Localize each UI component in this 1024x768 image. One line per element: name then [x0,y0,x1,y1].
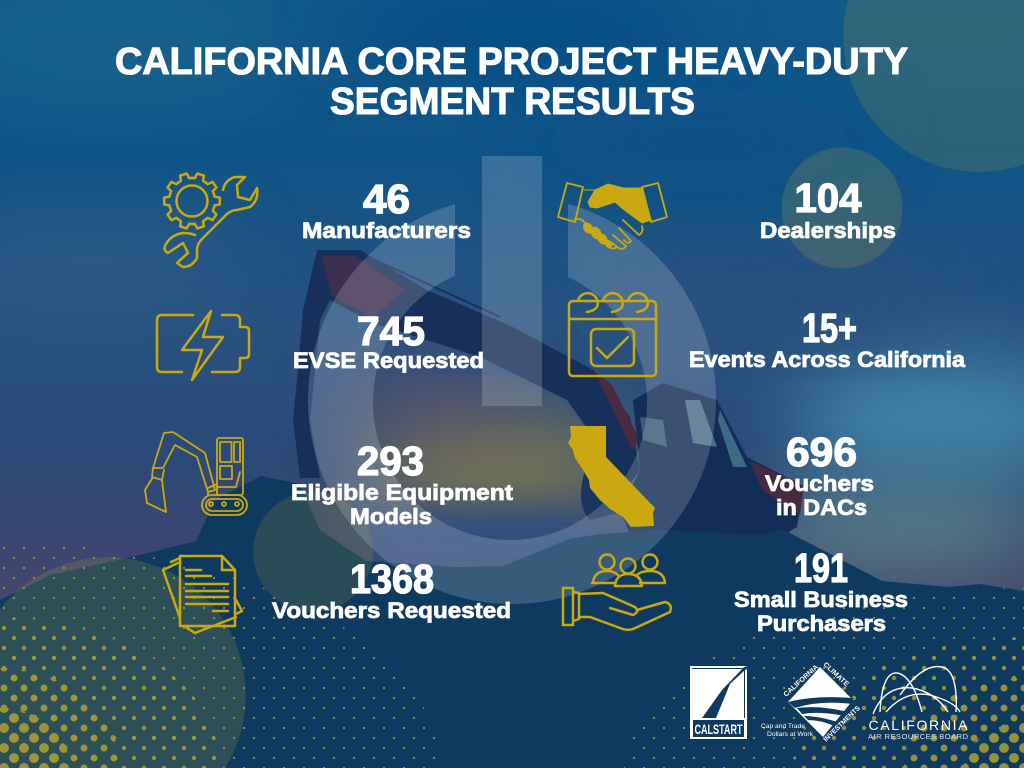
stat: 293 eligible equipment models: Models [350,504,432,529]
icon: mini excavator [145,432,247,515]
stat: 745 EVSE requested [293,308,484,373]
stat: 293 eligible equipment models: 293 [357,438,424,484]
logo: California Climate Investments: Cap and Trade [761,724,806,730]
stat: 745 EVSE requested: 745 [357,308,425,354]
title: SEGMENT RESULTS [330,81,695,123]
stat: 104 dealerships: Dealerships [760,218,896,243]
background: power symbol ring [308,156,716,604]
decorative translucent circle: upper right [782,148,902,268]
icon: California state map [568,426,655,527]
icon: people in open hand [563,554,671,630]
title [115,41,908,123]
logo: CALSTART [690,663,760,739]
stat: 745 EVSE requested: EVSE Requested [293,348,484,373]
logo: California Climate Investments: Dollars at Work [767,732,814,738]
icon: gear and wrench [164,172,257,267]
logo: California Air Resources Board: AIR RESOURCES BOARD [868,732,969,741]
stat: 293 eligible equipment models [291,438,514,529]
stat: 696 vouchers in DACs: Vouchers [765,471,874,496]
stat: 15+ events: Events Across California [689,347,966,372]
stat: 696 vouchers in DACs [765,429,874,520]
logo: California Air Resources Board: CALIFORNIA [868,717,968,733]
icon: battery with lightning bolt [157,311,249,380]
icon: handshake [558,183,667,250]
decorative translucent circle: top right [843,0,1024,172]
stat: 191 small business purchasers [734,545,908,636]
title: CALIFORNIA CORE PROJECT HEAVY-DUTY [115,41,908,83]
stat: 293 eligible equipment models: Eligible Equipment [291,480,514,505]
stat: 15+ events [689,305,966,372]
stat: 1368 vouchers requested: 1368 [350,556,434,602]
stat: 104 dealerships [760,175,896,243]
stat: 46 manufacturers [302,176,471,243]
halftone dots: bottom left [0,543,440,768]
stat: 696 vouchers in DACs: 696 [786,429,857,475]
decorative translucent circle: centre left [253,492,373,612]
background: ground hill [0,476,1024,768]
stat: 46 manufacturers: 46 [363,176,410,222]
stat: 1368 vouchers requested: Vouchers Requested [272,598,511,623]
logo: California Climate Investments: INVESTMENTS [823,705,862,743]
excavator photo silhouette [293,250,804,565]
stat: 696 vouchers in DACs: in DACs [776,495,867,520]
logo: California Air Resources Board [868,667,969,741]
decorative translucent circle: bottom left [0,557,246,768]
logo: California Climate Investments [761,661,862,743]
logo: California Climate Investments: CALIFORNIA [783,664,820,698]
stat: 1368 vouchers requested [272,556,511,623]
logo: California Climate Investments: CLIMATE [822,661,850,689]
logo: CALSTART: CALSTART [694,721,743,737]
stat: 191 small business purchasers: Small Business [734,587,908,612]
stat: 191 small business purchasers: Purchasers [757,611,886,636]
stat: 46 manufacturers: Manufacturers [302,218,471,243]
icon: documents [163,556,242,633]
halftone dots: bottom right [624,588,1024,768]
stat: 15+ events: 15+ [802,305,857,351]
stat: 191 small business purchasers: 191 [794,545,848,591]
icon: calendar with check mark [569,293,656,376]
stat: 104 dealerships: 104 [794,175,862,221]
